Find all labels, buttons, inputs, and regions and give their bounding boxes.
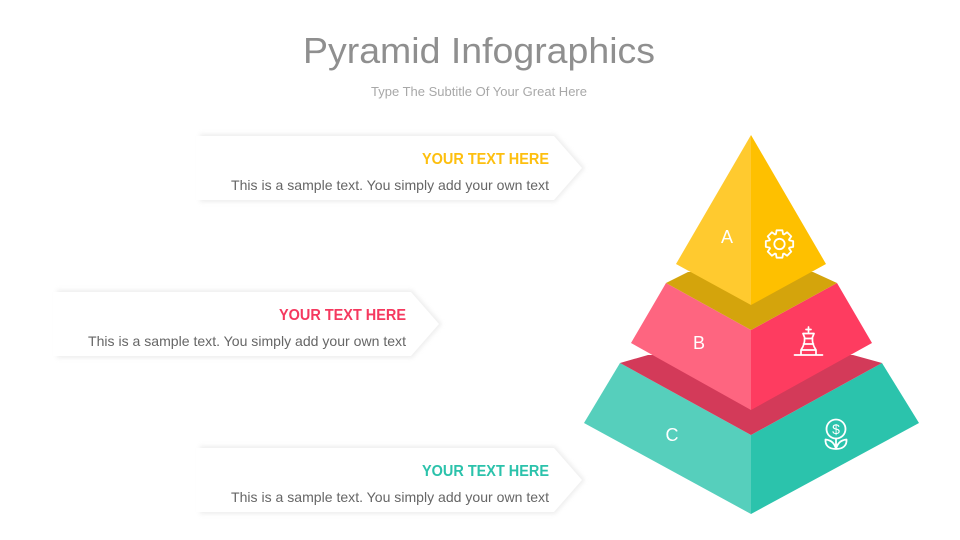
title: Pyramid Infographics bbox=[303, 30, 655, 71]
pyramid bbox=[584, 135, 919, 514]
text B: This is a sample text. You simply add your own text bbox=[88, 333, 406, 349]
text A: This is a sample text. You simply add your own text bbox=[231, 177, 549, 193]
text C: This is a sample text. You simply add your own text bbox=[231, 489, 549, 505]
callout C bbox=[196, 446, 585, 514]
icon: money plant bbox=[825, 420, 847, 449]
callout A bbox=[196, 134, 585, 202]
callout B bbox=[53, 290, 442, 358]
heading B: YOUR TEXT HERE bbox=[279, 307, 406, 324]
tier C top shelf bbox=[620, 355, 882, 435]
tier B top shelf bbox=[666, 272, 837, 330]
subtitle: Type The Subtitle Of Your Great Here bbox=[371, 84, 587, 99]
tier B bbox=[631, 283, 872, 410]
heading C: YOUR TEXT HERE bbox=[422, 463, 549, 480]
icon: money plant: $ bbox=[832, 421, 840, 437]
tier A bbox=[676, 135, 826, 305]
tier A letter: A bbox=[721, 227, 733, 247]
tier C letter: C bbox=[666, 425, 678, 445]
tier C bbox=[584, 363, 919, 514]
icon: gear bbox=[766, 230, 793, 258]
tier B letter: B bbox=[693, 333, 705, 353]
icon: chess king bbox=[794, 327, 822, 355]
heading A: YOUR TEXT HERE bbox=[422, 151, 549, 168]
